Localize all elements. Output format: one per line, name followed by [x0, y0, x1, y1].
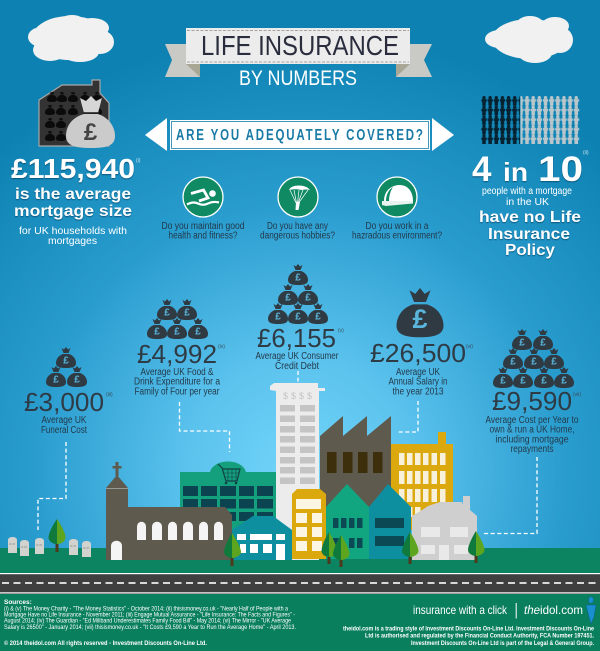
building: white tower — [270, 383, 325, 560]
stat: cost of a home: £ — [541, 376, 547, 386]
building: green house — [326, 484, 369, 559]
stat: 4 in 10: (ii) — [583, 150, 589, 156]
cloud right — [485, 16, 573, 63]
stat: annual salary: the year 2013 — [392, 386, 444, 398]
stat: 4 in 10: Insurance — [488, 226, 570, 243]
graveyard headstones: R.I.P. — [84, 547, 90, 550]
building: factory — [320, 416, 391, 520]
question: hazardous work — [352, 221, 442, 242]
stat: annual salary: £ — [412, 304, 428, 334]
question banner — [145, 118, 454, 151]
stat: 4 in 10: in — [503, 157, 528, 187]
stat: funeral cost: (iii) — [106, 392, 113, 398]
graveyard headstones — [8, 537, 91, 557]
stat: cost of a home: own & run a UK Home, — [490, 424, 574, 436]
stat: cost of a home: repayments — [510, 444, 554, 455]
stat: cost of a home: £ — [510, 356, 516, 368]
stat: annual salary — [370, 288, 473, 398]
stat: food and drink: Family of Four per year — [134, 386, 220, 398]
graveyard headstones: R.I.P. — [22, 546, 28, 549]
title banner: LIFE INSURANCE — [201, 30, 399, 61]
sources: Mortgage Have no Life Insurance - November 2011; (iii) Engage Mutual Assurance - "Life Insurance: The Facts and Figures" - — [4, 612, 295, 618]
stat: funeral cost: £ — [74, 374, 80, 386]
company disclaimer — [343, 626, 595, 647]
question: health: health and fitness? — [168, 230, 238, 242]
stat: food and drink: £ — [184, 308, 190, 318]
title banner — [165, 28, 432, 77]
question banner: ARE YOU ADEQUATELY COVERED? — [176, 125, 423, 143]
stat: annual salary: £26,500 — [370, 338, 466, 368]
stat: food and drink: £4,992 — [137, 339, 217, 369]
stat: food and drink: (iv) — [218, 344, 225, 350]
stat: cost of a home: £ — [519, 338, 525, 348]
question: health: Do you maintain good — [162, 221, 244, 232]
stat: cost of a home: £ — [551, 356, 557, 368]
stat: cost of a home — [486, 329, 581, 455]
stat: annual salary: Average UK — [396, 367, 440, 378]
building: supermarket — [180, 462, 276, 545]
building: teal house — [369, 484, 411, 559]
icon: parachute — [278, 177, 318, 217]
sources: Sources: — [4, 599, 32, 606]
stat: average mortgage size: mortgages — [48, 235, 97, 247]
cloud left — [28, 15, 114, 62]
stat: consumer credit debt: £ — [295, 272, 301, 284]
graveyard headstones: R.I.P. — [71, 545, 77, 548]
stat: cost of a home: £ — [500, 376, 506, 386]
copyright: © 2014 theidol.com All rights reserved - Investment Discounts On-Line Ltd. — [4, 639, 207, 647]
stat: food and drink: Average UK Food & — [140, 367, 214, 378]
icon: house of money — [39, 80, 115, 148]
stat: consumer credit debt: Credit Debt — [275, 361, 319, 372]
building: grey house — [412, 496, 477, 560]
stat: funeral cost: £ — [63, 356, 69, 366]
footer panel — [0, 594, 600, 651]
connector lines — [38, 371, 537, 534]
stat: consumer credit debt — [256, 264, 344, 372]
sources: August 2014; (iv) The Guardian - "Ed Miliband Underestimates Family Food Bill" - May 2014; (vi) The Mirror - "UK Average — [4, 619, 292, 625]
stat: funeral cost — [24, 347, 113, 436]
stat: funeral cost: Funeral Cost — [41, 425, 87, 436]
stat: 4 in 10: 10 — [538, 150, 583, 189]
stat: consumer credit debt: £ — [275, 312, 281, 322]
stat: food and drink: £ — [164, 308, 170, 318]
stat: annual salary: (vi) — [466, 344, 473, 350]
pictogram: people 4 in 10 — [481, 96, 580, 144]
stat: food and drink — [134, 299, 225, 398]
stat: funeral cost: Average UK — [42, 415, 87, 426]
question: hobbies — [260, 221, 335, 242]
stat: consumer credit debt: £ — [295, 312, 301, 322]
stat: funeral cost: £ — [53, 374, 59, 386]
question: hobbies: dangerous hobbies? — [260, 230, 335, 242]
subtitle: BY NUMBERS — [239, 67, 357, 90]
stat: food and drink: £ — [174, 326, 180, 338]
stat: cost of a home: £ — [531, 356, 537, 368]
icon: hard hat — [377, 177, 417, 217]
stat: 4 in 10: 4 — [472, 150, 492, 189]
stat: funeral cost: £3,000 — [24, 387, 104, 417]
stat: cost of a home: Average Cost per Year to — [486, 415, 579, 426]
question: hazardous work: Do you work in a — [366, 221, 429, 232]
stat: cost of a home: (vii) — [573, 392, 581, 398]
stat: food and drink: £ — [154, 326, 160, 338]
stat: annual salary: Annual Salary in — [388, 376, 448, 388]
icon: swimmer — [183, 177, 223, 217]
stat: food and drink: Drink Expenditure for a — [134, 376, 220, 388]
question: hobbies: Do you have any — [267, 221, 328, 232]
stat: average mortgage size — [11, 153, 141, 247]
road — [0, 573, 600, 594]
sources — [4, 599, 296, 631]
stat: average mortgage size: (i) — [136, 158, 141, 164]
trees — [48, 519, 484, 567]
ground — [0, 548, 600, 574]
stat: consumer credit debt: £ — [305, 292, 311, 304]
stat: 4 in 10: in the UK — [506, 197, 549, 208]
stat: cost of a home: £ — [520, 376, 526, 386]
stat: cost of a home: including mortgage — [496, 434, 569, 446]
graveyard headstones: R.I.P. — [10, 543, 16, 546]
question: health — [162, 221, 244, 242]
stat: cost of a home: £ — [561, 376, 567, 386]
stat: 4 in 10: have no Life — [479, 209, 581, 226]
building: teal shop — [232, 516, 292, 560]
building: church — [106, 462, 232, 560]
question: hazardous work: hazradous environment? — [352, 230, 442, 242]
sources: (i) & (v) The Money Charity - "The Money Statistics" - October 2014; (ii) thisismoney.co.uk - "Nearly Half of People with a — [4, 606, 289, 612]
stat: consumer credit debt: £ — [315, 312, 321, 322]
icon: house of money: £ — [84, 119, 98, 146]
lawn — [0, 560, 600, 574]
stat: food and drink: £ — [195, 326, 201, 338]
stat: average mortgage size: mortgage size — [14, 203, 132, 220]
stat: consumer credit debt: £ — [285, 292, 291, 304]
building: white tower: $$$$ — [283, 391, 312, 401]
stat: consumer credit debt: £6,155 — [257, 323, 336, 353]
stat: consumer credit debt: Average UK Consumer — [256, 351, 339, 362]
building: yellow apartments — [292, 489, 326, 559]
stat: average mortgage size: £115,940 — [11, 153, 135, 184]
stat: 4 in 10: people with a mortgage — [482, 186, 572, 197]
stat: cost of a home: £9,590 — [492, 386, 572, 416]
logo: insurance with a click theidol.com: theidol.com — [524, 603, 583, 617]
stat: 4 in 10: Policy — [505, 242, 555, 259]
logo: insurance with a click theidol.com: insurance with a click — [413, 603, 508, 617]
sources: Salary is 26500" - January 2014; (vii) thisismoney.co.uk - "It Costs £9,590 a Year to Run the Average Home" - April 2013. — [4, 625, 296, 631]
stat: consumer credit debt: (v) — [338, 328, 344, 334]
stat: 4 in 10 — [472, 150, 589, 259]
building: yellow block — [391, 432, 453, 530]
stat: cost of a home: £ — [540, 338, 546, 348]
stat: average mortgage size: is the average — [15, 186, 131, 203]
logo: insurance with a click theidol.com — [413, 597, 596, 624]
graveyard headstones: R.I.P. — [37, 544, 43, 547]
stat: average mortgage size: for UK households with — [19, 225, 127, 237]
